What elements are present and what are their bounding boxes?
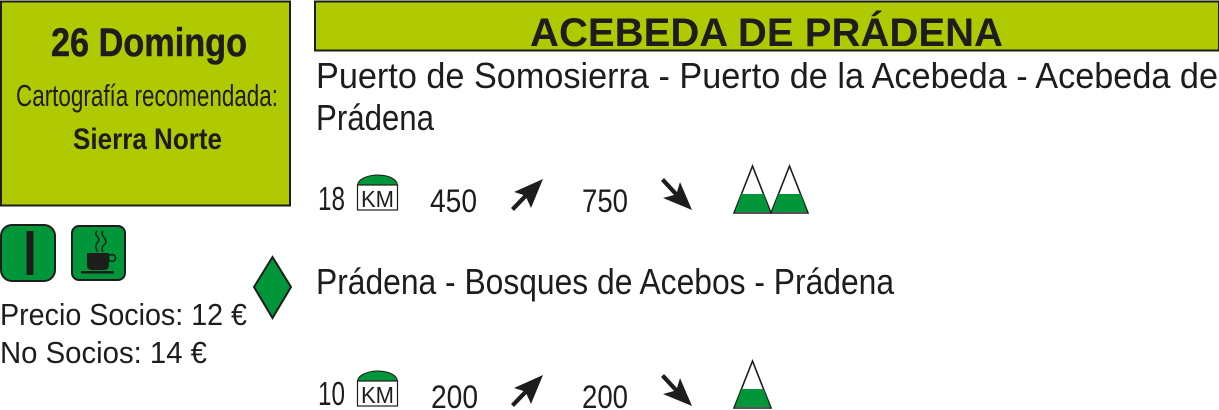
icon: route level sign [1, 225, 55, 281]
icon: difficulty two peaks [734, 166, 808, 213]
icon: coffee stop [72, 226, 125, 280]
arrow: up [511, 375, 543, 407]
title bar [315, 2, 1219, 55]
arrow: down [661, 374, 692, 406]
route 2 description: Prádena - Bosques de Acebos - Prádena [316, 261, 895, 302]
text: member price: Precio Socios: 12 € [0, 297, 247, 332]
ascent: 450 [430, 183, 477, 219]
panel: date and map [1, 2, 290, 206]
route 1 description: Prádena [316, 97, 435, 138]
title: ACEBEDA DE PRÁDENA [530, 10, 1003, 55]
icon: km sign [358, 371, 398, 408]
heading: date: 26 Domingo [51, 21, 247, 65]
distance: 18 [318, 180, 345, 217]
icon: green diamond [254, 257, 291, 318]
route 1 description [316, 55, 1218, 138]
icon: km sign [358, 175, 398, 212]
icon: difficulty one peak [734, 361, 771, 408]
route 2 stats [318, 361, 771, 410]
text: recommended map label: Cartografía recomendada: [16, 78, 278, 113]
descent: 750 [582, 183, 628, 219]
icon: km sign: KM [361, 186, 394, 212]
route 1 stats [318, 166, 808, 219]
text: map name: Sierra Norte [73, 123, 222, 156]
icon: km sign: KM [361, 382, 394, 408]
arrow: up [511, 179, 543, 211]
arrow: down [661, 178, 692, 210]
text: non-member price: No Socios: 14 € [0, 335, 207, 370]
